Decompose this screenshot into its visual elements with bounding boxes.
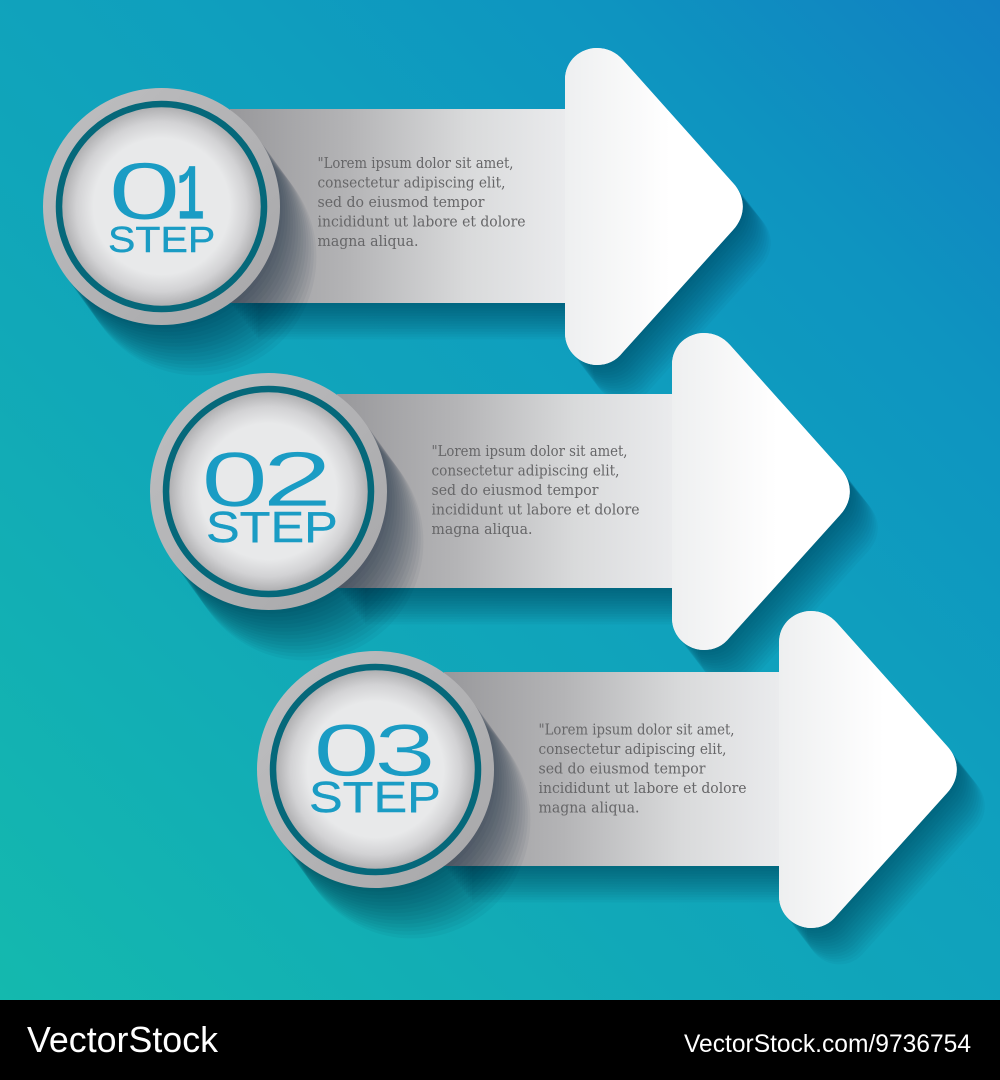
body text: step 01: magna aliqua. xyxy=(318,234,418,250)
number: 01: 1 xyxy=(176,152,205,244)
number: 03: 0 xyxy=(313,708,380,792)
watermark: VectorStock logo: VectorStock xyxy=(27,1019,219,1060)
body text: step 03 xyxy=(538,722,746,816)
number: 03 xyxy=(313,708,436,792)
body text: step 01: incididunt ut labore et dolore xyxy=(318,214,526,230)
footer bar xyxy=(27,1019,971,1060)
watermark: image id: VectorStock.com/9736754 xyxy=(684,1030,971,1058)
body text: step 02: "Lorem ipsum dolor sit amet, xyxy=(432,444,628,460)
number: 01: 0 xyxy=(108,146,181,236)
panel: step 03 xyxy=(257,611,983,962)
body text: step 03: sed do eiusmod tempor xyxy=(538,762,706,778)
panel: step 01 xyxy=(43,48,769,394)
badge circle: step 02 xyxy=(150,373,387,610)
body text: step 02 xyxy=(432,444,640,538)
arrow: step 02 xyxy=(337,333,850,650)
panel: step 02 xyxy=(150,333,876,672)
number: 03: 3 xyxy=(374,708,436,792)
body text: step 03: magna aliqua. xyxy=(538,800,640,816)
body text: step 02: sed do eiusmod tempor xyxy=(432,483,599,499)
body text: step 02: incididunt ut labore et dolore xyxy=(432,502,640,518)
arrow: step 03 xyxy=(444,611,957,928)
number: 02 xyxy=(201,435,333,523)
badge circle: step 03 xyxy=(257,651,494,888)
body text: step 02: magna aliqua. xyxy=(432,522,532,538)
badge circle: step 01 xyxy=(43,88,280,325)
body text: step 01: "Lorem ipsum dolor sit amet, xyxy=(318,156,514,172)
body text: step 01: consectetur adipiscing elit, xyxy=(318,176,506,192)
number: 02: 2 xyxy=(262,435,333,523)
body text: step 03: incididunt ut labore et dolore xyxy=(538,781,746,797)
body text: step 01 xyxy=(318,156,526,250)
body text: step 03: "Lorem ipsum dolor sit amet, xyxy=(538,722,734,738)
label: STEP 02: STEP xyxy=(206,504,338,552)
label: STEP 03: STEP xyxy=(309,774,441,822)
body text: step 01: sed do eiusmod tempor xyxy=(318,195,485,211)
body text: step 02: consectetur adipiscing elit, xyxy=(432,464,620,480)
arrow: step 01 xyxy=(230,48,743,365)
label: STEP 01: STEP xyxy=(108,219,215,260)
body text: step 03: consectetur adipiscing elit, xyxy=(538,742,726,758)
number: 02: 0 xyxy=(201,435,268,523)
